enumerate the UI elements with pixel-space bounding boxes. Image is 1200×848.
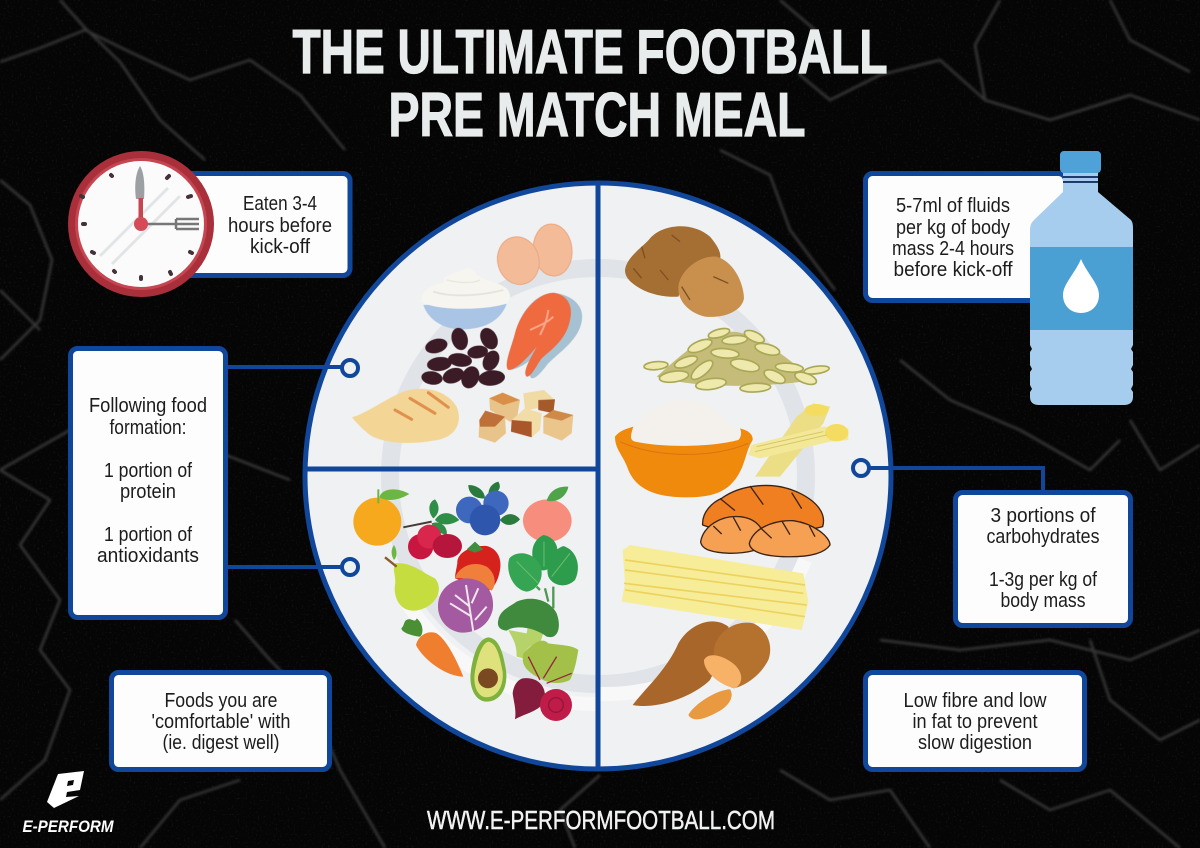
callout: carbohydrates: 3 portions of [990,505,1096,527]
icon: black beans [421,325,506,391]
callout: comfortable foods: 'comfortable' with [152,711,290,733]
title: PRE MATCH MEAL [388,81,806,150]
icon: blueberries [456,482,520,535]
callout: fluids: 5-7ml of fluids [896,195,1010,217]
icon: grilled chicken [352,389,459,443]
callout: fluids: mass 2-4 hours [892,238,1014,260]
callout: comfortable foods: Foods you are [164,690,278,712]
callout: food formation: 1 portion of [104,524,192,546]
callout: carbohydrates: carbohydrates [986,526,1100,548]
icon: yogurt bowl [421,268,510,329]
callout: low fibre: Low fibre and low [904,690,1047,712]
callout: food formation [70,348,226,618]
icon: eggs [492,222,575,289]
icon: carrot [401,618,463,677]
logo: E-Perform: E-PERFORM [22,817,114,836]
callout: food formation: formation: [110,417,186,439]
connector lines [226,360,1043,575]
icon: pear [385,545,439,611]
icon: bread rolls [701,485,830,557]
website url: WWW.E-PERFORMFOOTBALL.COM [427,805,775,835]
icon: beetroot [513,641,578,721]
logo: E-Perform [22,771,114,836]
icon: rice bowl [615,400,753,497]
callout: low fibre [866,672,1084,770]
icon: spaghetti [622,545,808,630]
icon: tofu cubes [479,390,573,443]
food: antioxidants quadrant [353,482,578,721]
icon: peach [523,487,572,542]
title [292,18,888,150]
callout: carbohydrates: body mass [1000,590,1086,612]
icon: sweet potato [633,621,770,719]
icon: penne [748,403,848,477]
callout: low fibre: slow digestion [918,732,1032,754]
callout: carbohydrates [956,492,1130,626]
icon: clock [68,151,214,297]
icon: spinach [508,535,578,608]
callout: food formation: 1 portion of [104,460,192,482]
callout: food formation: protein [120,481,176,503]
plate [305,183,891,769]
callout: carbohydrates: 1-3g per kg of [989,569,1097,591]
plate inner ring [390,268,806,704]
icon: tomato [455,542,500,591]
icon: orange [353,489,409,546]
icon: salmon steak [507,293,582,378]
title: THE ULTIMATE FOOTBALL [292,18,888,87]
icon: potatoes [625,226,744,317]
callout: fluids: before kick-off [894,259,1013,281]
callout: timing: kick-off [250,236,310,258]
callout: low fibre: in fat to prevent [912,711,1038,733]
icon: water bottle [1030,151,1133,405]
callout: comfortable foods: (ie. digest well) [162,732,280,754]
icon: avocado [470,637,506,702]
callout: timing [170,174,350,276]
callout: comfortable foods [112,672,330,770]
icon: oats [644,327,830,393]
callout: fluids [866,174,1066,300]
icon: red cabbage [438,578,493,633]
food: carbohydrates lower [622,485,830,719]
icon: broccoli [498,599,559,658]
food: protein quadrant [352,222,582,443]
callout: timing: Eaten 3-4 [243,193,317,215]
callout: food formation: antioxidants [97,545,199,567]
callout: timing: hours before [228,215,332,237]
icon: cherries [403,499,462,559]
food: carbohydrates upper [615,226,848,497]
callout: food formation: Following food [89,395,207,417]
callout: fluids: per kg of body [896,217,1010,239]
